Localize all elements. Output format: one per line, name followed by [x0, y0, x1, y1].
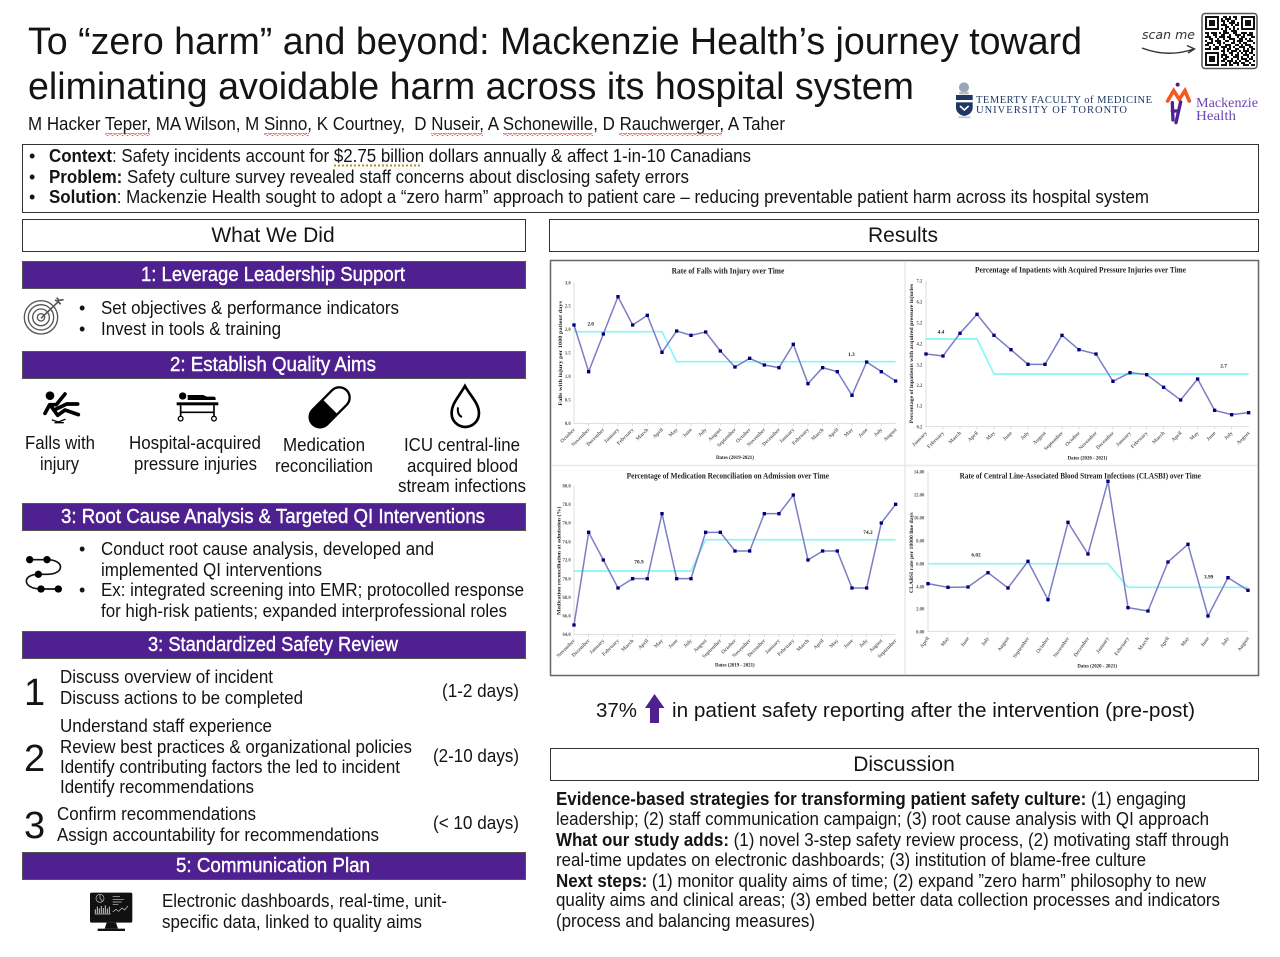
review step 1: 1 [24, 672, 45, 714]
chart: CLABSI rate: April [919, 636, 931, 649]
logo: University of Toronto: UNIVERSITY OF TORONTO [976, 105, 1127, 116]
section bar 1: Leverage Leadership Support: 1: Leverage Leadership Support [141, 264, 405, 286]
icon: dashboard monitor [90, 893, 132, 931]
chart: rate of falls with injury: Rate of Falls with Injury over Time [672, 267, 785, 276]
chart: CLABSI rate: March [1137, 636, 1151, 652]
communication plan text: Electronic dashboards, real-time, unit- [162, 891, 447, 911]
chart: rate of falls with injury: 1.5 [565, 352, 571, 357]
chart: medication reconciliation on admission: November [731, 638, 753, 659]
heading: Results [550, 220, 1258, 252]
chart: CLABSI rate: 6.00 [916, 562, 925, 567]
chart: rate of falls with injury: March [635, 427, 650, 442]
chart: medication reconciliation on admission: May [653, 638, 665, 650]
communication plan text: specific data, linked to quality aims [162, 912, 422, 932]
chart: rate of falls with injury: 0.0 [565, 422, 571, 427]
chart: inpatients with acquired pressure injuries: 4.2 [917, 343, 923, 348]
review step 2: Understand staff experience [60, 716, 272, 736]
logo: Mackenzie Health: Mackenzie [1196, 96, 1258, 111]
section bar 5: Communication Plan [22, 852, 526, 880]
chart: rate of falls with injury: December [761, 427, 782, 448]
quality aim: medication reconciliation: reconciliation [275, 456, 373, 476]
chart: medication reconciliation on admission: March [620, 638, 635, 653]
chart: medication reconciliation on admission: April [637, 638, 650, 651]
review step 3: Assign accountability for recommendations [57, 825, 379, 845]
panel: context, problem, solution [22, 144, 1258, 212]
chart: CLABSI rate: December [1073, 636, 1091, 658]
icon: process flow [26, 556, 62, 593]
chart: rate of falls with injury: 0.5 [565, 399, 571, 404]
chart: rate of falls with injury: February [616, 427, 636, 447]
chart: inpatients with acquired pressure injuries: May [1189, 430, 1201, 442]
section 1 bullets [79, 298, 399, 339]
chart: rate of falls with injury: September [716, 427, 738, 449]
section bar 5: Communication Plan: 5: Communication Plan [176, 855, 370, 877]
review step 3 [24, 804, 519, 847]
quality aim: medication reconciliation: Medication [283, 435, 365, 455]
heading: Discussion: Discussion [853, 753, 955, 776]
section 1 bullets: • [79, 298, 85, 318]
review step 1: Discuss actions to be completed [60, 688, 303, 708]
chart: medication reconciliation on admission: August [868, 638, 884, 654]
heading: What We Did: What We Did [211, 224, 335, 247]
communication plan text [162, 891, 447, 932]
section 1 bullets: Invest in tools & training [101, 319, 281, 339]
chart: rate of falls with injury: July [873, 427, 884, 438]
chart: rate of falls with injury: October [559, 427, 577, 445]
logo: Mackenzie Health [1168, 83, 1258, 124]
chart: CLABSI rate: 6.02 [971, 553, 981, 559]
chart: medication reconciliation on admission: 80.0 [563, 484, 571, 489]
chart: medication reconciliation on admission: February [601, 638, 621, 658]
chart: medication reconciliation on admission: 68.0 [563, 596, 571, 601]
review step 1: Discuss overview of incident [60, 667, 273, 687]
chart: inpatients with acquired pressure injuries: January [911, 430, 929, 448]
chart: rate of falls with injury: 2.0 [565, 328, 571, 333]
review step 1: (1-2 days) [442, 681, 519, 701]
heading: Discussion [550, 748, 1258, 780]
chart: CLABSI rate [909, 470, 1251, 669]
chart: inpatients with acquired pressure injuries: August [1032, 430, 1048, 446]
chart: rate of falls with injury: February [791, 427, 811, 447]
chart: inpatients with acquired pressure injuries: 6.2 [917, 301, 923, 306]
panel: context, problem, solution: Context: Safety incidents account for $2.75 billion dollars annually & affect 1-in-10 Canadians [49, 146, 751, 166]
chart: inpatients with acquired pressure injuries: November [1078, 430, 1099, 451]
chart: CLABSI rate: August [997, 636, 1011, 653]
chart: medication reconciliation on admission: August [693, 638, 709, 654]
title [28, 21, 1082, 108]
chart: rate of falls with injury: 1.0 [565, 375, 571, 380]
chart: medication reconciliation on admission: October [720, 638, 738, 656]
review step 3: 3 [24, 805, 45, 847]
chart: medication reconciliation on admission: March [796, 638, 811, 653]
chart: medication reconciliation on admission: 74.0 [563, 540, 571, 545]
icon: QR code [1202, 14, 1257, 68]
chart: medication reconciliation on admission: Dates (2019 - 2021) [715, 661, 755, 668]
chart: medication reconciliation on admission: 64.0 [563, 633, 571, 638]
review step 2 [24, 716, 519, 797]
chart: medication reconciliation on admission: December [746, 638, 768, 659]
chart: rate of falls with injury: 2.0 [587, 321, 594, 327]
logo: University of Toronto [956, 82, 1152, 117]
discussion text: Evidence-based strategies for transforming patient safety culture: (1) engaging [556, 789, 1186, 809]
chart: inpatients with acquired pressure injuries: March [948, 430, 963, 446]
chart: inpatients with acquired pressure injuries: December [1095, 430, 1116, 451]
heading: What We Did [22, 220, 526, 252]
chart: medication reconciliation on admission: 70.9 [634, 559, 644, 565]
chart: medication reconciliation on admission: Percentage of Medication Reconciliation on Admission over Time [627, 471, 829, 480]
chart: medication reconciliation on admission: June [667, 638, 680, 650]
chart: medication reconciliation on admission: February [777, 638, 796, 658]
discussion text: real-time updates on electronic dashboards; (3) institution of blame-free culture [556, 850, 1146, 870]
chart: inpatients with acquired pressure injuries: 5.2 [917, 321, 923, 326]
chart: inpatients with acquired pressure injuries: 4.4 [938, 330, 945, 336]
review step 1 [24, 667, 519, 714]
chart: medication reconciliation on admission: 66.0 [563, 614, 571, 619]
chart: medication reconciliation on admission: November [556, 638, 577, 659]
chart: CLABSI rate: 4.00 [916, 585, 925, 590]
chart: inpatients with acquired pressure injuries: August [1236, 430, 1252, 446]
heading: Results: Results [868, 224, 938, 247]
chart: inpatients with acquired pressure injuries: February [926, 430, 946, 450]
chart: medication reconciliation on admission: July [858, 638, 870, 649]
chart: CLABSI rate: April [1159, 636, 1171, 649]
logo: Mackenzie Health: Health [1196, 109, 1236, 124]
chart: rate of falls with injury: April [827, 427, 840, 440]
panel: context, problem, solution: • [29, 167, 35, 187]
section bar 4: Standardized Safety Review: 3: Standardized Safety Review [148, 634, 398, 656]
section 1 bullets: Set objectives & performance indicators [101, 298, 399, 318]
chart: inpatients with acquired pressure injuries: June [1002, 430, 1014, 442]
chart: medication reconciliation on admission: January [764, 638, 782, 656]
chart: rate of falls with injury: August [707, 427, 723, 443]
chart: medication reconciliation on admission: September [877, 638, 899, 660]
chart: CLABSI rate: Dates (2020 - 2021) [1077, 662, 1117, 669]
chart: CLABSI rate: February [1114, 636, 1131, 657]
review step 3: Confirm recommendations [57, 804, 256, 824]
chart: rate of falls with injury [558, 267, 899, 461]
chart: CLABSI rate: June [1200, 636, 1211, 648]
chart: medication reconciliation on admission: 72.0 [563, 559, 571, 564]
chart: rate of falls with injury: March [810, 427, 825, 442]
discussion text: (process and balancing measures) [556, 911, 815, 931]
chart: inpatients with acquired pressure injuries: April [967, 430, 980, 443]
chart: inpatients with acquired pressure injuries: Percentage of Inpatients with Acquired Pressure Injuries over Time [975, 266, 1186, 275]
section 3 bullets: for high-risk patients; expanded interprofessional roles [101, 601, 507, 621]
quality aim: ICU central-line infections [398, 386, 526, 496]
chart: CLABSI rate: July [1220, 636, 1231, 647]
section bar 4: Standardized Safety Review [22, 632, 526, 658]
title: To “zero harm” and beyond: Mackenzie Health’s journey toward [28, 21, 1082, 63]
section bar 2: Establish Quality Aims [22, 352, 526, 378]
discussion text: leadership; (2) staff communication campaign; (3) root cause analysis with QI approach [556, 809, 1209, 829]
chart: CLABSI rate: August [1237, 636, 1251, 653]
review step 2: Review best practices & organizational policies [60, 737, 412, 757]
quality aim: pressure injuries: Hospital-acquired [129, 433, 261, 453]
chart: CLABSI rate: 0.00 [916, 630, 925, 635]
chart: rate of falls with injury: Falls with injury per 1000 patient days [558, 301, 564, 406]
chart: rate of falls with injury: 3.0 [565, 281, 571, 286]
chart: rate of falls with injury: July [697, 427, 709, 438]
chart: inpatients with acquired pressure injuries: July [1223, 430, 1235, 442]
discussion text: Next steps: (1) monitor quality aims of time; (2) expand ”zero harm” philosophy to new [556, 871, 1207, 891]
review step 2: 2 [24, 738, 45, 780]
quality aim: ICU central-line infections: stream infections [398, 476, 526, 496]
quality aim: falls with injury [25, 391, 95, 474]
chart: CLABSI rate: July [980, 636, 991, 647]
callout: 37% increase in safety reporting [596, 694, 1195, 723]
section bar 1: Leverage Leadership Support [22, 262, 526, 288]
scan me label with arrow [1142, 27, 1195, 53]
chart: inpatients with acquired pressure injuries: February [1130, 430, 1150, 450]
authors: M Hacker Teper, MA Wilson, M Sinno, K Courtney, D Nuseir, A Schonewille, D Rauchwerger, A Taher [28, 114, 785, 134]
discussion text: quality aims and clinical areas; (3) embed better data collection processes and indicators [556, 890, 1220, 910]
chart: medication reconciliation on admission: Medication reconciliation at admission (%) [555, 506, 562, 615]
callout: 37% increase in safety reporting: 37% [596, 700, 637, 722]
section 3 bullets: Ex: integrated screening into EMR; protocolled response [101, 580, 524, 600]
chart: CLABSI rate: May [1180, 636, 1191, 648]
chart: CLABSI rate: 3.99 [1204, 575, 1214, 581]
discussion text [556, 789, 1229, 931]
discussion text: What our study adds: (1) novel 3-step safety review process, (2) motivating staff through [556, 830, 1229, 850]
chart: CLABSI rate: CLABSI rate per 10000 line days [909, 512, 915, 593]
quality aim: falls with injury: injury [40, 454, 79, 474]
chart: medication reconciliation on admission: May [828, 638, 840, 650]
chart: inpatients with acquired pressure injuries: 0.2 [917, 425, 923, 430]
chart: inpatients with acquired pressure injuries: 3.2 [917, 363, 923, 368]
chart: CLABSI rate: Rate of Central Line-Associated Blood Stream Infections (CLASBI) over Time [960, 471, 1201, 480]
chart: rate of falls with injury: May [668, 427, 680, 439]
chart: rate of falls with injury: August [883, 427, 899, 443]
chart: inpatients with acquired pressure injuries: 2.2 [917, 384, 923, 389]
chart: inpatients with acquired pressure injuries: October [1064, 430, 1082, 448]
chart: rate of falls with injury: January [603, 427, 621, 445]
chart: inpatients with acquired pressure injuries: April [1171, 430, 1184, 443]
chart: inpatients with acquired pressure injuries [909, 266, 1252, 462]
chart: CLABSI rate: 12.00 [914, 493, 925, 498]
chart: inpatients with acquired pressure injuries: Dates (2020 - 2021) [1068, 455, 1108, 462]
chart: rate of falls with injury: June [857, 427, 870, 439]
logo: University of Toronto: TEMERTY FACULTY of MEDICINE [976, 95, 1152, 106]
chart: inpatients with acquired pressure injuries: January [1115, 430, 1133, 448]
chart: rate of falls with injury: November [570, 427, 592, 448]
quality aim: ICU central-line infections: ICU central-line [404, 435, 520, 455]
scan me label with arrow: scan me [1142, 27, 1195, 42]
chart: CLABSI rate: October [1035, 636, 1051, 655]
review step 2: Identify recommendations [60, 777, 254, 797]
chart: rate of falls with injury: 1.3 [848, 352, 855, 358]
chart: inpatients with acquired pressure injuries: June [1205, 430, 1218, 442]
panel: context, problem, solution: Problem: Safety culture survey revealed staff concerns about disclosing safety errors [49, 167, 689, 187]
chart: rate of falls with injury: January [778, 427, 796, 445]
chart: CLABSI rate: November [1052, 636, 1071, 659]
chart: inpatients with acquired pressure injuries: May [985, 430, 997, 442]
chart: medication reconciliation on admission: July [683, 638, 694, 649]
section 3 bullets: • [79, 580, 85, 600]
review step 2: Identify contributing factors the led to incident [60, 757, 400, 777]
chart: inpatients with acquired pressure injuries: 1.2 [917, 405, 923, 410]
chart: CLABSI rate: 14.00 [914, 470, 925, 475]
quality aim: pressure injuries [129, 392, 261, 474]
section 3 bullets: • [79, 539, 85, 559]
chart: rate of falls with injury: December [586, 427, 607, 448]
section 1 bullets: • [79, 319, 85, 339]
chart: rate of falls with injury: April [652, 427, 665, 440]
chart: medication reconciliation on admission: April [813, 638, 826, 651]
chart: inpatients with acquired pressure injuries: March [1151, 430, 1166, 446]
chart: CLABSI rate: 2.00 [916, 608, 925, 613]
chart: CLABSI rate: May [940, 636, 951, 648]
chart: inpatients with acquired pressure injuries: 7.2 [917, 279, 923, 284]
icon: target [24, 298, 64, 334]
chart: rate of falls with injury: Dates (2019-2021) [716, 454, 754, 461]
chart: medication reconciliation on admission: September [701, 638, 724, 660]
panel: context, problem, solution: • [29, 146, 35, 166]
chart: medication reconciliation on admission: December [571, 638, 592, 659]
chart: rate of falls with injury: June [682, 427, 694, 439]
quality aim: medication reconciliation [275, 383, 373, 476]
section bar 2: Establish Quality Aims: 2: Establish Quality Aims [170, 354, 376, 376]
chart: medication reconciliation on admission: 74.2 [863, 530, 873, 536]
chart: medication reconciliation on admission: 76.0 [563, 522, 571, 527]
chart: inpatients with acquired pressure injuries: Percentage of inpatients with acquired pressure injuries [909, 284, 915, 423]
chart: CLABSI rate: 8.00 [916, 539, 925, 544]
callout: 37% increase in safety reporting: in patient safety reporting after the intervention (pre-post) [672, 700, 1195, 722]
chart: medication reconciliation on admission: June [843, 638, 855, 650]
chart: CLABSI rate: September [1012, 636, 1031, 660]
chart: medication reconciliation on admission: 70.0 [563, 577, 571, 582]
section bar 3: Root Cause Analysis: 3: Root Cause Analysis & Targeted QI Interventions [61, 506, 485, 528]
section 3 bullets [79, 539, 524, 621]
quality aim: pressure injuries: pressure injuries [134, 454, 257, 474]
chart: medication reconciliation on admission: January [588, 638, 606, 656]
quality aim: falls with injury: Falls with [25, 433, 95, 453]
review step 3: (< 10 days) [433, 813, 519, 833]
review step 2: (2-10 days) [433, 746, 519, 766]
chart: rate of falls with injury: 2.5 [565, 305, 571, 310]
chart: medication reconciliation on admission: 78.0 [563, 503, 571, 508]
panel: context, problem, solution: • [29, 187, 35, 207]
chart: rate of falls with injury: May [843, 427, 855, 439]
chart: rate of falls with injury: October [735, 427, 753, 445]
section 3 bullets: Conduct root cause analysis, developed and [101, 539, 434, 559]
title: eliminating avoidable harm across its hospital system [28, 66, 914, 108]
chart: inpatients with acquired pressure injuries: 2.7 [1220, 364, 1227, 370]
section 3 bullets: implemented QI interventions [101, 560, 322, 580]
panel: charts frame [550, 260, 1258, 676]
chart: inpatients with acquired pressure injuries: September [1043, 430, 1065, 452]
chart: rate of falls with injury: November [746, 427, 767, 448]
chart: CLABSI rate: June [960, 636, 971, 648]
chart: CLABSI rate: 10.00 [914, 516, 925, 521]
chart: CLABSI rate: January [1095, 636, 1111, 655]
chart: medication reconciliation on admission [555, 471, 899, 668]
panel: context, problem, solution: Solution: Mackenzie Health sought to adopt a “zero harm” approach to patient care – reducing preventable patient harm across its hospital system [49, 187, 1149, 207]
chart: inpatients with acquired pressure injuries: July [1020, 430, 1031, 442]
quality aim: ICU central-line infections: acquired blood [407, 456, 518, 476]
